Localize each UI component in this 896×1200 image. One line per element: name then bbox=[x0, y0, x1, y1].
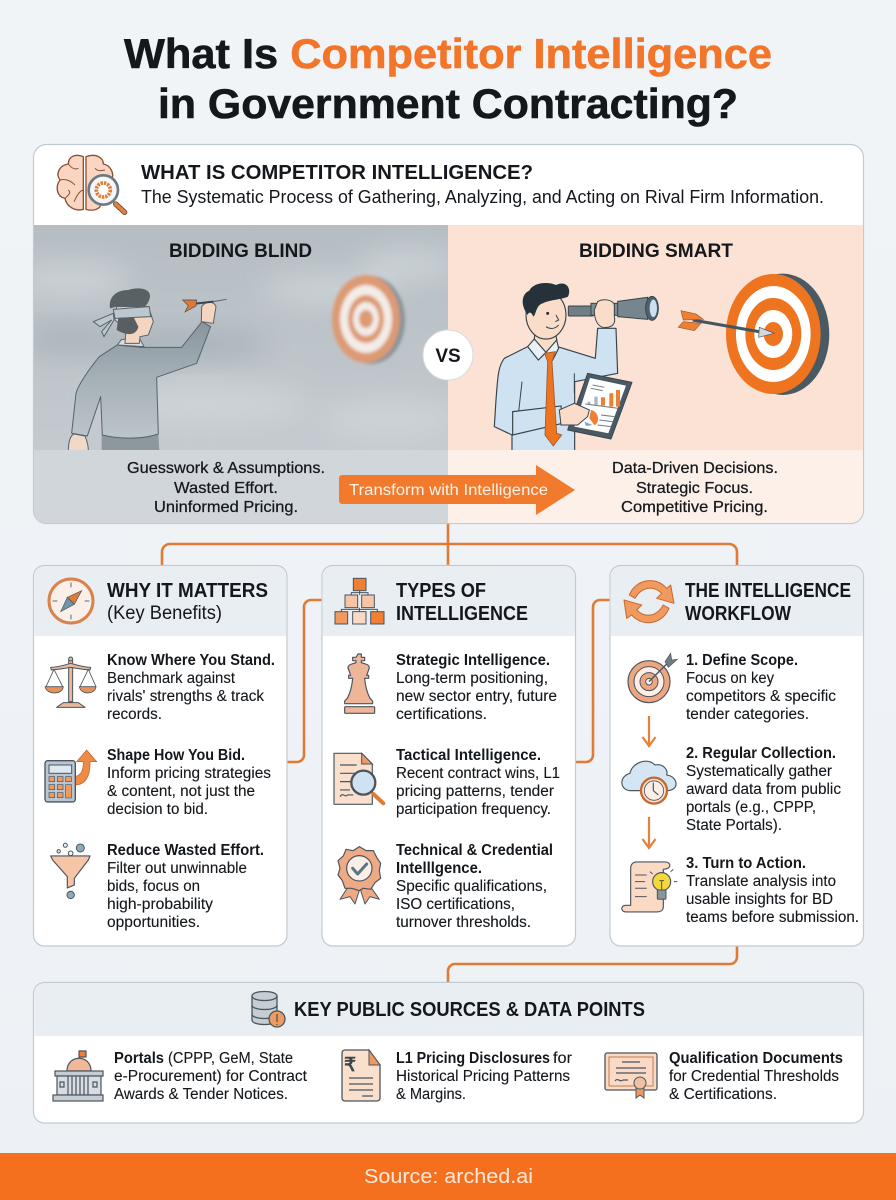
icon: bullseye with arrow bbox=[678, 274, 829, 395]
icon: funnel bbox=[51, 843, 90, 899]
heading: WHY IT MATTERS bbox=[107, 580, 268, 602]
icon: award badge bbox=[338, 847, 381, 904]
icon: document with magnifier bbox=[334, 753, 383, 804]
text: tactical intelligence bbox=[396, 747, 560, 818]
heading: THE INTELLIGENCE bbox=[685, 580, 851, 602]
heading: WORKFLOW bbox=[685, 603, 791, 625]
text: technical and credential intelligence: ISO certifications, bbox=[396, 896, 515, 913]
icon: block pyramid bbox=[335, 578, 384, 624]
icon: blurred target bbox=[332, 275, 405, 364]
icon: scales bbox=[45, 657, 96, 707]
label: bidding blind: BIDDING BLIND bbox=[169, 241, 312, 262]
text: l1 pricing: Historical Pricing Patterns bbox=[396, 1068, 570, 1085]
text: l1 pricing bbox=[396, 1050, 572, 1103]
text: strategic intelligence: certifications. bbox=[396, 706, 487, 723]
title: in Government Contracting? bbox=[158, 80, 738, 127]
text: know where you stand bbox=[107, 652, 275, 723]
heading bbox=[396, 580, 528, 625]
text: know where you stand: Know Where You Stand. bbox=[107, 652, 275, 669]
panel: what is competitor intelligence bbox=[10, 144, 864, 524]
panel: bidding blind bbox=[10, 225, 460, 451]
text: know where you stand: rivals' strengths & track bbox=[107, 688, 264, 705]
heading: (Key Benefits) bbox=[107, 603, 222, 624]
icon: database with alert coin bbox=[252, 992, 285, 1027]
text: define scope bbox=[686, 652, 836, 723]
text: define scope: 1. Define Scope. bbox=[686, 652, 798, 669]
text: reduce wasted effort: Filter out unwinnable bbox=[107, 860, 247, 877]
arrow: transform with intelligence: Transform with Intelligence bbox=[349, 482, 548, 499]
subheading: The Systematic Process of Gathering, Analyzing, and Acting on Rival Firm Information. bbox=[141, 187, 824, 207]
connector: workflow to sources bbox=[448, 946, 737, 982]
icon: certificate bbox=[605, 1053, 657, 1098]
heading: INTELLIGENCE bbox=[396, 603, 528, 625]
text: qualification documents bbox=[669, 1050, 843, 1103]
heading bbox=[107, 580, 268, 624]
text: l1 pricing: L1 Pricing Disclosures bbox=[396, 1050, 550, 1067]
text: regular collection: award data from public bbox=[686, 781, 841, 798]
badge: vs: VS bbox=[435, 346, 461, 367]
arrow: step one to two bbox=[642, 716, 656, 746]
text: reduce wasted effort: Reduce Wasted Effort. bbox=[107, 842, 264, 859]
icon: compass bbox=[49, 579, 93, 623]
text: turn to action: Translate analysis into bbox=[686, 873, 836, 890]
text: strategic intelligence: Strategic Intelligence. bbox=[396, 652, 550, 669]
footer: source bbox=[0, 1153, 896, 1200]
text: portals bbox=[114, 1050, 308, 1103]
panel: intelligence workflow bbox=[610, 566, 864, 946]
badge: vs bbox=[423, 330, 473, 380]
heading: WHAT IS COMPETITOR INTELLIGENCE? bbox=[141, 162, 533, 184]
text: l1 pricing: for bbox=[553, 1050, 572, 1067]
caption band: blind: Uninformed Pricing. bbox=[154, 499, 298, 516]
panel: why it matters bbox=[34, 566, 287, 946]
arrow: transform with intelligence bbox=[339, 465, 575, 515]
footer: source: Source: arched.ai bbox=[364, 1166, 533, 1188]
icon: calculator with arrow bbox=[45, 750, 97, 802]
icon: scroll with light bulb bbox=[622, 862, 677, 912]
icon: cycle arrows bbox=[624, 581, 674, 623]
panel: bidding smart bbox=[448, 225, 863, 452]
text: portals: e-Procurement) for Contract bbox=[114, 1068, 308, 1085]
text: portals: Portals bbox=[114, 1050, 164, 1067]
text: turn to action: 3. Turn to Action. bbox=[686, 855, 806, 872]
text: shape how you bid: Shape How You Bid. bbox=[107, 747, 245, 764]
text: regular collection: Systematically gather bbox=[686, 763, 832, 780]
text: portals: Awards & Tender Notices. bbox=[114, 1086, 288, 1103]
text: reduce wasted effort bbox=[107, 842, 264, 931]
text: technical and credential intelligence: Technical & Credential bbox=[396, 842, 553, 859]
heading: KEY PUBLIC SOURCES & DATA POINTS bbox=[294, 999, 645, 1021]
text: define scope: competitors & specific bbox=[686, 688, 836, 705]
icon: target with dart bbox=[628, 653, 677, 703]
title bbox=[124, 30, 772, 127]
text: regular collection: 2. Regular Collection. bbox=[686, 745, 836, 762]
text: technical and credential intelligence: turnover thresholds. bbox=[396, 914, 531, 931]
text: strategic intelligence: new sector entry, future bbox=[396, 688, 557, 705]
text: define scope: tender categories. bbox=[686, 706, 809, 723]
title: What Is Competitor Intelligence bbox=[124, 30, 772, 77]
icon: chess king bbox=[345, 654, 375, 713]
text: reduce wasted effort: opportunities. bbox=[107, 914, 200, 931]
caption band: smart: Competitive Pricing. bbox=[621, 499, 768, 516]
text: qualification documents: & Certifications. bbox=[669, 1086, 777, 1103]
text: regular collection: portals (e.g., CPPP, bbox=[686, 799, 816, 816]
text: shape how you bid: decision to bid. bbox=[107, 801, 208, 818]
connector: main panel to three cards bbox=[162, 523, 737, 565]
text: technical and credential intelligence: Intelllgence. bbox=[396, 860, 482, 877]
text: strategic intelligence bbox=[396, 652, 557, 723]
text: reduce wasted effort: high-probability bbox=[107, 896, 213, 913]
heading: TYPES OF bbox=[396, 580, 486, 602]
text: qualification documents: for Credential Thresholds bbox=[669, 1068, 839, 1085]
illustration: analyst with telescope and tablet bbox=[494, 283, 658, 452]
caption band: smart: Data-Driven Decisions. bbox=[612, 460, 778, 477]
heading bbox=[685, 580, 851, 625]
caption band: blind: Guesswork & Assumptions. bbox=[127, 460, 325, 477]
connector: why it matters to types bbox=[287, 600, 322, 762]
text: shape how you bid: & content, not just the bbox=[107, 783, 255, 800]
panel: key public sources bbox=[34, 982, 864, 1123]
text: tactical intelligence: participation frequency. bbox=[396, 801, 551, 818]
text: technical and credential intelligence bbox=[396, 842, 553, 931]
text: define scope: Focus on key bbox=[686, 670, 774, 687]
text: know where you stand: records. bbox=[107, 706, 162, 723]
panel: types of intelligence bbox=[322, 566, 576, 946]
text: technical and credential intelligence: Specific qualifications, bbox=[396, 878, 547, 895]
text: turn to action bbox=[686, 855, 859, 926]
text: portals: (CPPP, GeM, State bbox=[168, 1050, 293, 1067]
text: turn to action: teams before submission. bbox=[686, 909, 859, 926]
text: l1 pricing: & Margins. bbox=[396, 1086, 466, 1103]
connector: types to workflow bbox=[575, 600, 610, 762]
caption band: blind: Wasted Effort. bbox=[174, 480, 278, 497]
text: reduce wasted effort: bids, focus on bbox=[107, 878, 200, 895]
text: strategic intelligence: Long-term positioning, bbox=[396, 670, 548, 687]
text: shape how you bid bbox=[107, 747, 271, 818]
text: shape how you bid: Inform pricing strategies bbox=[107, 765, 271, 782]
icon: government building bbox=[53, 1051, 103, 1101]
text: turn to action: usable insights for BD bbox=[686, 891, 833, 908]
caption band: blind bbox=[34, 450, 448, 523]
icon: brain with magnifier bbox=[57, 155, 125, 212]
caption band: smart: Strategic Focus. bbox=[636, 480, 753, 497]
text: qualification documents: Qualification Documents bbox=[669, 1050, 843, 1067]
icon: rupee document bbox=[342, 1050, 380, 1101]
text: tactical intelligence: Tactical Intelligence. bbox=[396, 747, 541, 764]
text: tactical intelligence: Recent contract wins, L1 bbox=[396, 765, 560, 782]
illustration: blindfolded man throwing dart bbox=[68, 288, 227, 451]
icon: cloud with clock bbox=[622, 761, 676, 804]
label: bidding smart: BIDDING SMART bbox=[579, 241, 733, 262]
icon: rupee document: ₹ bbox=[344, 1055, 356, 1076]
text: know where you stand: Benchmark against bbox=[107, 670, 236, 687]
text: tactical intelligence: pricing patterns, tender bbox=[396, 783, 554, 800]
caption band: smart bbox=[448, 450, 863, 523]
text: regular collection: State Portals). bbox=[686, 817, 782, 834]
arrow: step two to three bbox=[642, 817, 656, 848]
text: regular collection bbox=[686, 745, 841, 834]
